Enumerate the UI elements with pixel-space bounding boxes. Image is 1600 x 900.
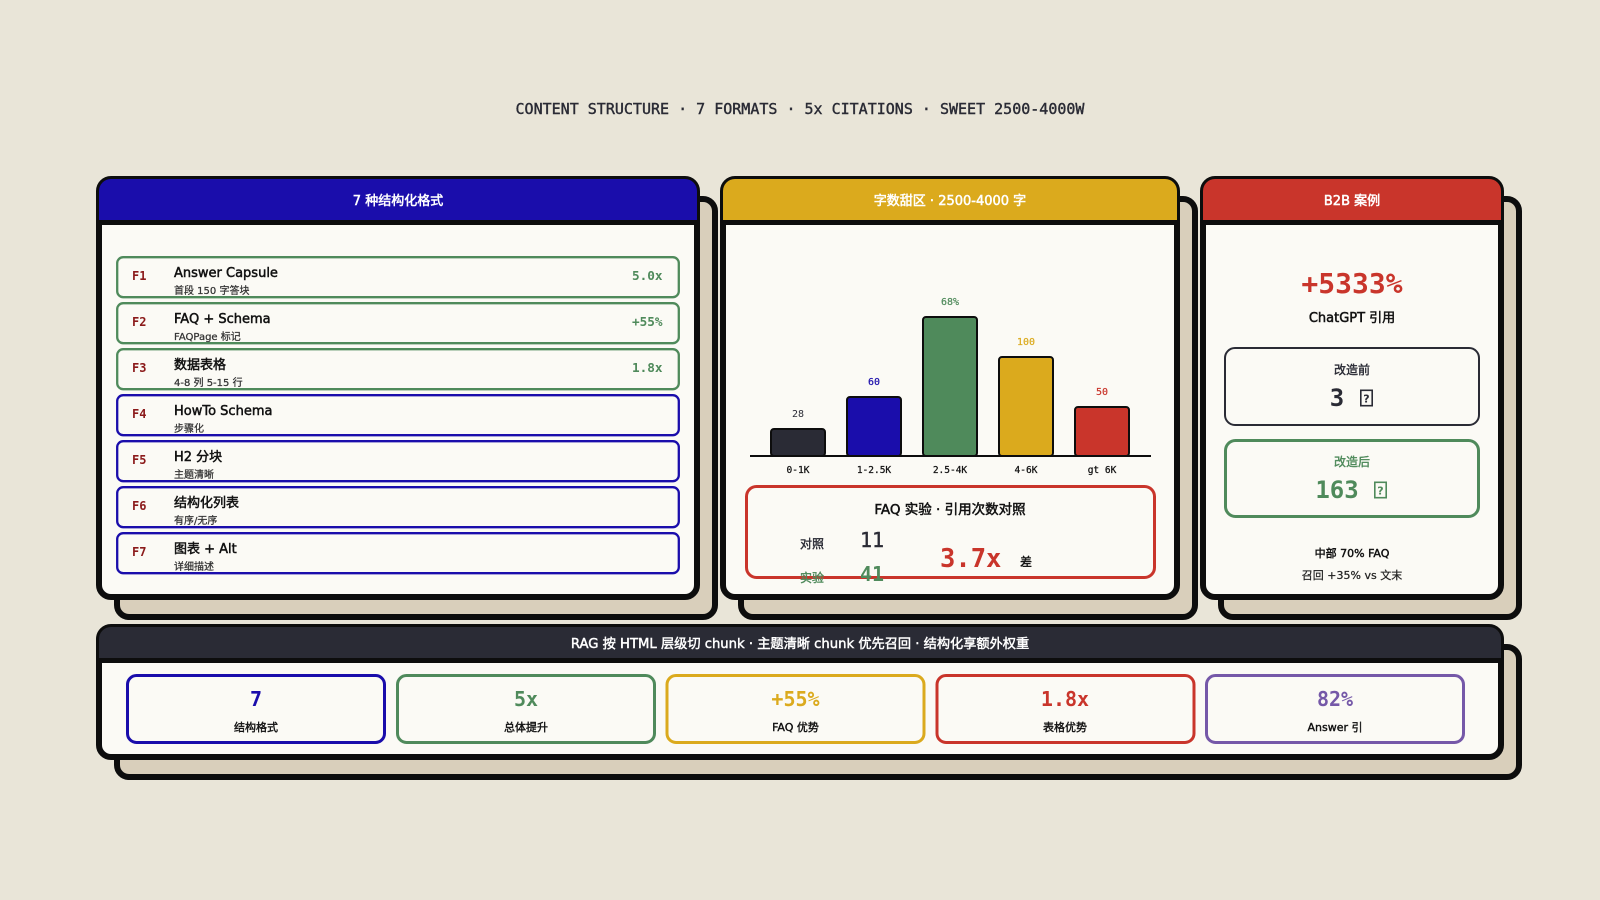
format row F1: F1 bbox=[132, 269, 146, 283]
stat card: table bbox=[937, 676, 1194, 742]
format row F1: 首段 150 字答块 bbox=[174, 284, 249, 297]
format row F6: F6 bbox=[132, 499, 146, 513]
after card: 163 bbox=[1315, 476, 1359, 504]
panel heading: word count: 字数甜区 · 2500-4000 字 bbox=[874, 193, 1026, 209]
stat card: formats: 结构格式 bbox=[234, 720, 278, 734]
format row F7: 图表 + Alt bbox=[174, 542, 237, 557]
format row F4: F4 bbox=[132, 407, 146, 421]
after card bbox=[1226, 440, 1478, 516]
panel: seven formats bbox=[96, 179, 715, 617]
bar chart: 2.5-4K bbox=[933, 465, 967, 476]
stat card: answer bbox=[1206, 676, 1464, 742]
stat card: FAQ: FAQ 优势 bbox=[772, 721, 819, 734]
icon: missing glyph box: ? bbox=[1363, 392, 1370, 406]
format row F2: FAQPage 标记 bbox=[174, 331, 241, 343]
format row F7: F7 bbox=[132, 545, 146, 559]
footnote bbox=[1302, 546, 1402, 582]
format row F3: 1.8x bbox=[632, 360, 663, 375]
stat card: formats bbox=[128, 676, 384, 742]
format row F3: 4-8 列 5-15 行 bbox=[174, 376, 243, 389]
format row F1 bbox=[117, 257, 679, 297]
callout: FAQ experiment: 对照 bbox=[800, 537, 824, 551]
icon: missing glyph box bbox=[1375, 482, 1386, 498]
panel heading: RAG bbox=[96, 627, 1504, 663]
format row F4: HowTo Schema bbox=[174, 404, 272, 419]
big stat bbox=[1301, 267, 1403, 326]
panel: word count sweet spot bbox=[720, 179, 1195, 617]
bar chart: 60 bbox=[868, 377, 880, 388]
before card: 改造前 bbox=[1334, 362, 1370, 377]
panel heading: seven formats bbox=[96, 179, 700, 225]
bar chart: 4-6K bbox=[1015, 465, 1038, 476]
stat card: FAQ bbox=[667, 676, 924, 742]
format row F1: Answer Capsule bbox=[174, 266, 278, 281]
stat card: overall lift: 5x bbox=[514, 687, 538, 711]
callout: FAQ experiment: 3.7x bbox=[940, 544, 1001, 574]
format row F3 bbox=[117, 349, 679, 389]
bar chart: 100 bbox=[1017, 337, 1035, 348]
callout: FAQ experiment: 41 bbox=[860, 562, 884, 586]
panel heading: RAG: RAG 按 HTML 层级切 chunk · 主题清晰 chunk 优先召回 · 结构化享额外权重 bbox=[571, 635, 1029, 652]
stat card: FAQ: +55% bbox=[771, 687, 820, 711]
bar chart bbox=[750, 297, 1151, 476]
callout: FAQ experiment: FAQ 实验 · 引用次数对照 bbox=[874, 502, 1026, 518]
format row F5: H2 分块 bbox=[174, 450, 222, 465]
callout: FAQ experiment: 差 bbox=[1020, 555, 1032, 569]
stat card: overall lift bbox=[398, 676, 654, 742]
big stat: +5333% bbox=[1301, 267, 1403, 300]
stat card: formats: 7 bbox=[250, 687, 262, 711]
callout: FAQ experiment bbox=[746, 486, 1154, 586]
bar chart: 68% bbox=[941, 297, 959, 308]
footnote: 召回 +35% vs 文末 bbox=[1302, 568, 1402, 582]
format row F5: 主题清晰 bbox=[174, 468, 214, 481]
stat card: answer: 82% bbox=[1317, 687, 1353, 711]
stat card: table: 1.8x bbox=[1041, 687, 1089, 711]
title: CONTENT STRUCTURE · 7 FORMATS · 5x CITATIONS · SWEET 2500-4000W bbox=[516, 100, 1085, 118]
format row F6: 有序/无序 bbox=[174, 514, 217, 527]
panel heading: B2B case bbox=[1200, 179, 1504, 225]
format row F1: 5.0x bbox=[632, 268, 663, 283]
big stat: ChatGPT 引用 bbox=[1309, 311, 1395, 326]
format row F6: 结构化列表 bbox=[174, 496, 239, 511]
icon: missing glyph box bbox=[1361, 390, 1372, 406]
bar chart: 50 bbox=[1096, 387, 1108, 398]
before card bbox=[1225, 348, 1479, 425]
bar chart: 0-1K bbox=[787, 465, 810, 476]
format row F3: F3 bbox=[132, 361, 146, 375]
panel: RAG summary bbox=[96, 627, 1519, 777]
panel: B2B case bbox=[1200, 179, 1519, 617]
format row F7: 详细描述 bbox=[174, 560, 214, 573]
format row F6 bbox=[117, 487, 679, 527]
format row F2: F2 bbox=[132, 315, 146, 329]
stat card: overall lift: 总体提升 bbox=[504, 720, 548, 734]
panel heading: seven formats: 7 种结构化格式 bbox=[353, 193, 443, 209]
bar chart: gt 6K bbox=[1088, 465, 1117, 476]
before card: 3 bbox=[1330, 384, 1344, 412]
format row F5 bbox=[117, 441, 679, 481]
callout: FAQ experiment: 11 bbox=[860, 528, 884, 552]
format row F3: 数据表格 bbox=[174, 357, 226, 373]
stat card: table: 表格优势 bbox=[1043, 720, 1087, 734]
callout: FAQ experiment: 实验 bbox=[800, 570, 824, 585]
format row F4 bbox=[117, 395, 679, 435]
bar chart: 1-2.5K bbox=[857, 465, 891, 476]
stat card: answer: Answer 引 bbox=[1307, 720, 1363, 734]
format row F2 bbox=[117, 303, 679, 343]
format row F2: FAQ + Schema bbox=[174, 312, 271, 327]
footnote: 中部 70% FAQ bbox=[1315, 546, 1390, 560]
after card: 改造后 bbox=[1334, 455, 1370, 469]
format row F5: F5 bbox=[132, 453, 146, 467]
panel heading: B2B case: B2B 案例 bbox=[1324, 194, 1380, 209]
format row F4: 步骤化 bbox=[174, 422, 204, 435]
format row F2: +55% bbox=[632, 314, 663, 329]
format row F7 bbox=[117, 533, 679, 573]
panel heading: word count bbox=[720, 179, 1180, 225]
icon: missing glyph box: ? bbox=[1377, 484, 1384, 498]
bar chart: 28 bbox=[792, 409, 804, 420]
